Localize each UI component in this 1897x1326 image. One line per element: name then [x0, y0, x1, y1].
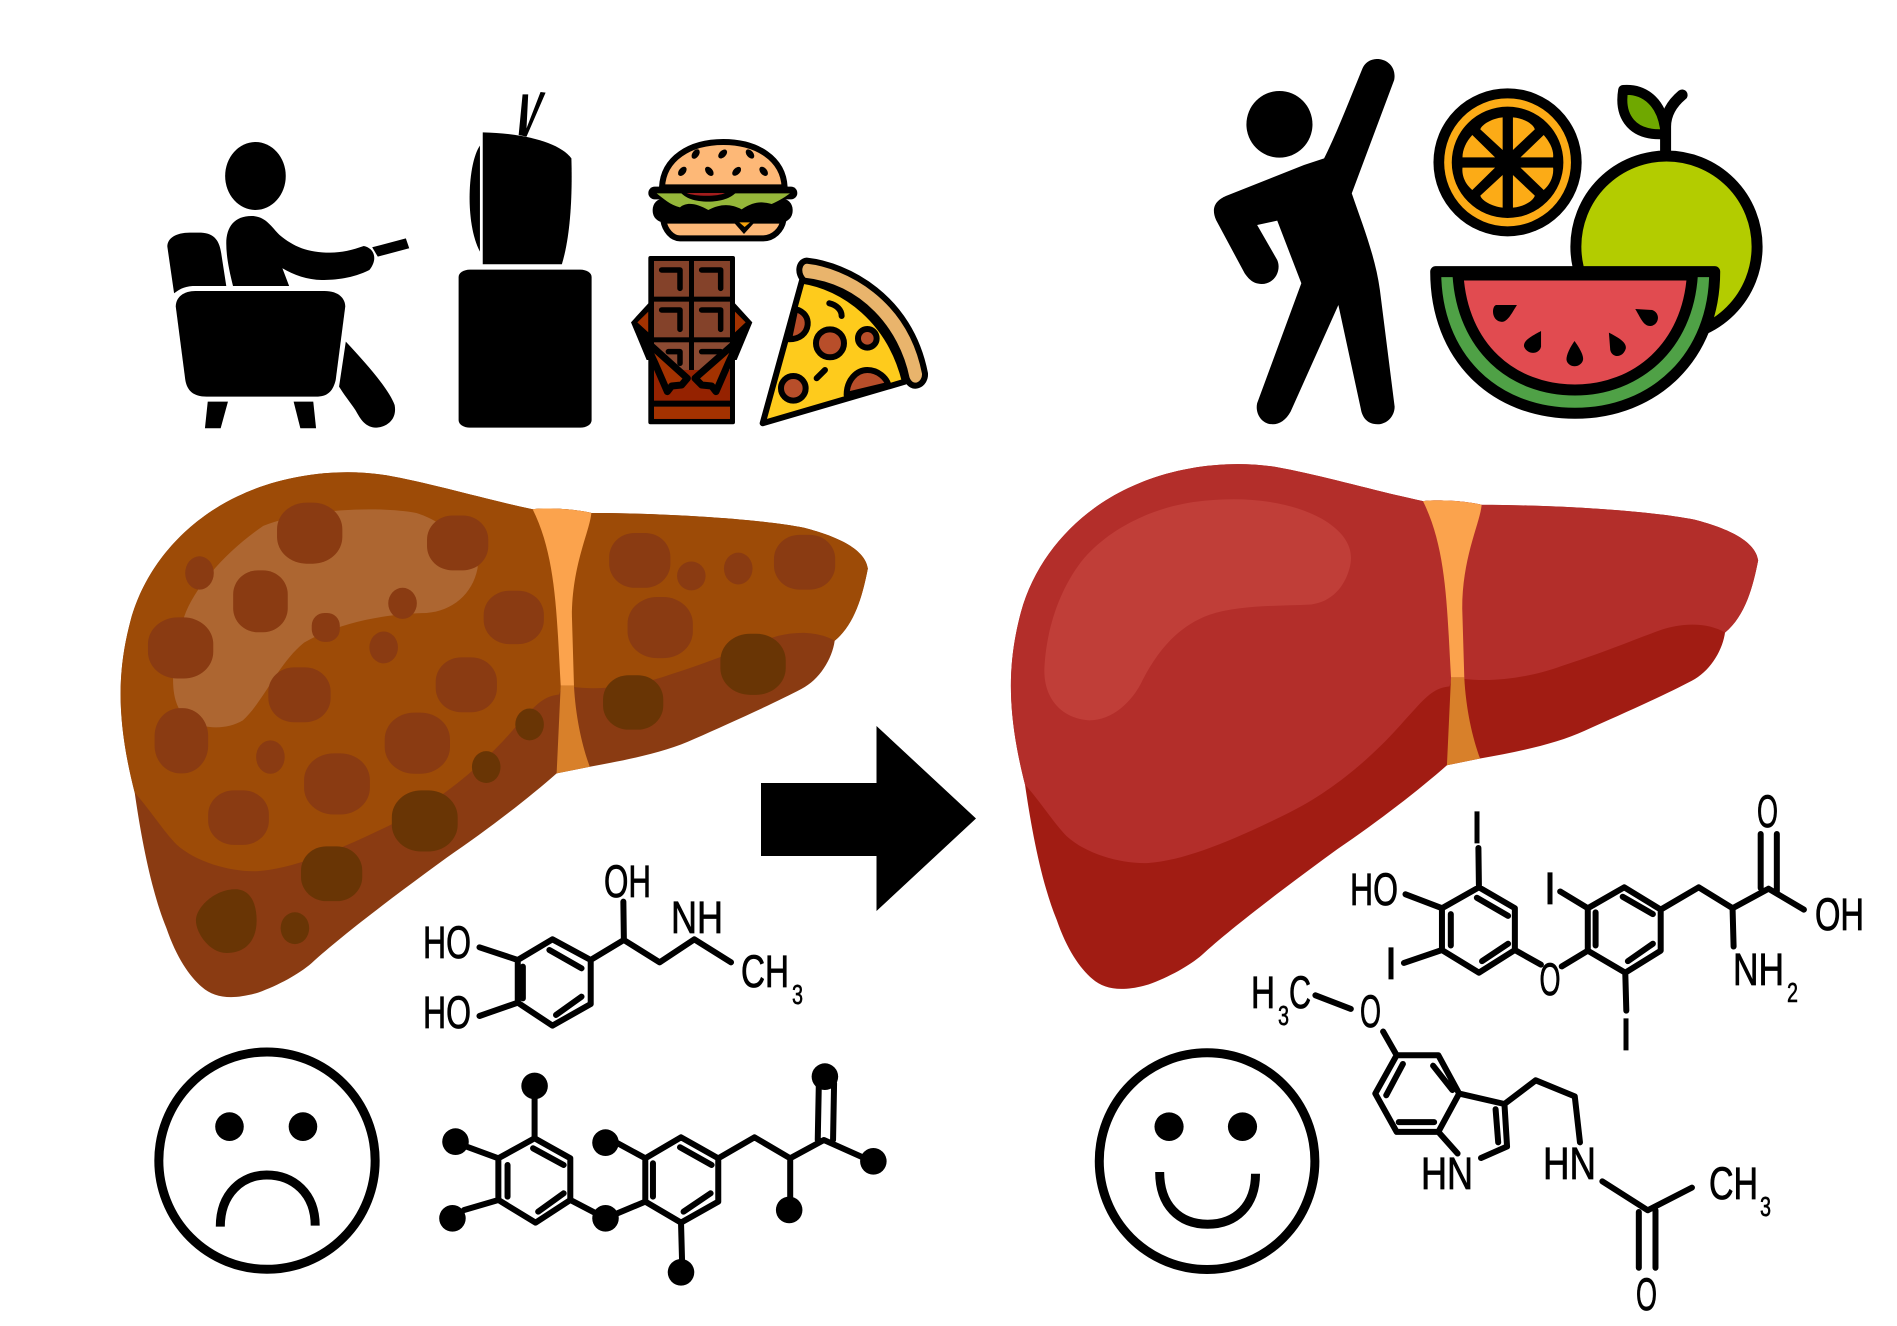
- icon: sad face: [159, 1052, 375, 1269]
- liver upper surface: [121, 472, 868, 871]
- icon: chocolate bar: [631, 256, 752, 424]
- fat deposits: [148, 503, 835, 845]
- molecule: thyroxine: I: [1385, 938, 1397, 989]
- falciform ligament: [1423, 500, 1482, 677]
- panel: fatty liver: [121, 472, 868, 997]
- molecule: thyroxine: OH: [1815, 889, 1864, 940]
- icon: green apple: [1576, 90, 1757, 337]
- icon: person exercising: [1214, 59, 1395, 424]
- molecule: adrenaline-like structure: HO: [423, 987, 471, 1038]
- molecule: melatonin: O: [1360, 986, 1381, 1037]
- molecule: thyroxine: I: [1620, 1009, 1632, 1060]
- molecule: melatonin: O: [1636, 1269, 1657, 1320]
- lower ligament: [557, 686, 590, 773]
- liver outline, dark lower lobe: [121, 472, 868, 997]
- lower ligament: [1447, 677, 1480, 765]
- icon: orange slice: [1433, 88, 1582, 236]
- molecule: thyroxine: I: [1544, 863, 1556, 914]
- liver highlight: [173, 509, 478, 727]
- molecule: thyroxine: HO: [1350, 864, 1398, 915]
- molecule: melatonin: HN: [1543, 1138, 1596, 1189]
- icon: burger: [648, 142, 797, 238]
- molecule: thyroxine: I: [1471, 802, 1483, 853]
- liver outline, dark lower lobe: [1011, 464, 1758, 989]
- icon: person sitting in armchair with remote: [167, 142, 409, 428]
- molecule: adrenaline-like structure: CH: [741, 946, 789, 997]
- molecule: melatonin: CH: [1709, 1158, 1758, 1209]
- molecule: melatonin: 3: [1278, 1000, 1289, 1031]
- icon: television: [459, 92, 592, 428]
- falciform ligament: [533, 509, 591, 686]
- molecule: adrenaline-like structure: HO: [423, 917, 471, 968]
- molecule: melatonin: [1251, 967, 1771, 1320]
- panel: healthy liver: [1011, 464, 1758, 989]
- molecule: melatonin: H: [1251, 967, 1275, 1018]
- molecule: adrenaline-like structure: [423, 856, 803, 1038]
- molecule: thyroxine: 2: [1787, 977, 1798, 1008]
- molecule: adrenaline-like structure: NH: [671, 892, 723, 943]
- liver highlight: [1044, 499, 1351, 720]
- icon: happy face: [1099, 1053, 1315, 1270]
- icon: pizza slice: [763, 261, 925, 423]
- dark fat deposits: [196, 634, 786, 953]
- arrow: [761, 726, 976, 911]
- molecule: adrenaline-like structure: 3: [792, 979, 803, 1010]
- liver upper surface: [1011, 464, 1758, 863]
- molecule: adrenaline-like structure: OH: [604, 856, 651, 907]
- molecule: thyroxine: O: [1540, 954, 1560, 1005]
- molecule: thyroxine: [1350, 786, 1864, 1060]
- molecule: thyroxine: O: [1757, 786, 1778, 837]
- molecule: thyroxine: NH: [1733, 944, 1784, 995]
- molecule: melatonin: C: [1289, 967, 1311, 1018]
- icon: watermelon slice: [1436, 272, 1715, 413]
- molecule: melatonin: 3: [1760, 1191, 1771, 1222]
- molecule: placeholder structure with dots: [439, 1063, 887, 1286]
- molecule: melatonin: HN: [1421, 1148, 1473, 1199]
